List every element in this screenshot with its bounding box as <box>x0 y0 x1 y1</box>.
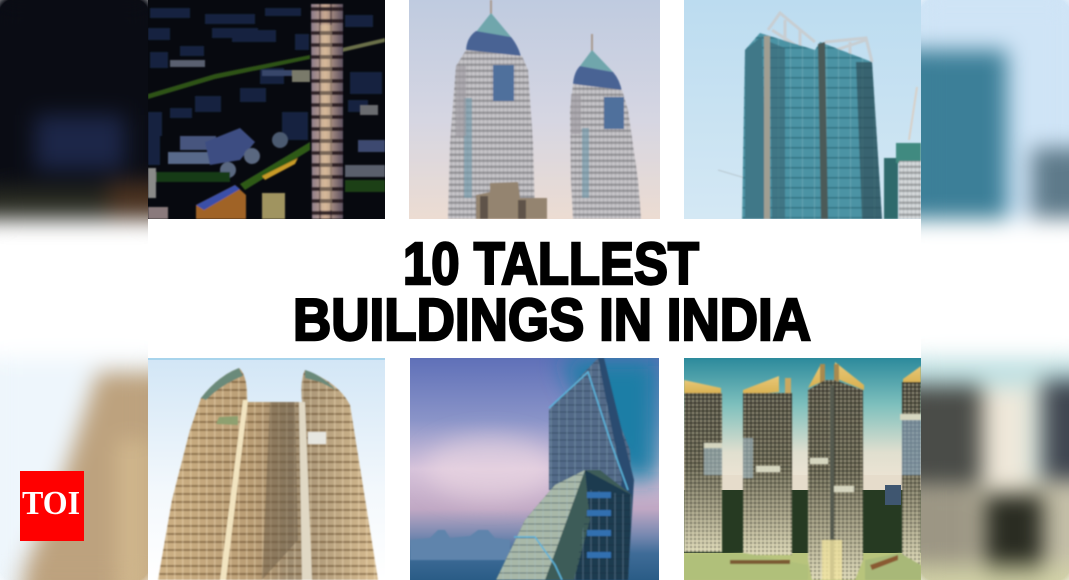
tower 2 <box>743 376 792 555</box>
title band <box>148 219 921 358</box>
photo panel: glass office tower at dusk <box>410 358 659 580</box>
logo: TOI: TOI <box>22 485 80 522</box>
city blocks <box>148 8 382 165</box>
blurred left background <box>0 0 148 580</box>
right tower <box>570 34 641 219</box>
blurred right background <box>921 0 1069 580</box>
main body <box>742 33 882 219</box>
title <box>293 231 811 353</box>
photo panel: tan tower under construction <box>148 358 385 580</box>
foreground block <box>476 182 547 219</box>
tower 4 <box>900 366 921 567</box>
roof frame <box>768 13 872 62</box>
crane <box>909 87 917 140</box>
distant skyline <box>410 530 510 560</box>
logo: TOI <box>20 471 84 541</box>
photo panel: night aerial tower <box>148 0 385 219</box>
residential cluster <box>168 152 214 164</box>
tower <box>311 4 343 219</box>
green roads <box>148 55 310 99</box>
podium garden <box>718 552 790 564</box>
left tower <box>448 0 535 219</box>
neighbouring tower <box>884 158 898 219</box>
lower wedge <box>544 470 629 580</box>
foreground lit buildings <box>196 185 246 219</box>
photo panel: teal glass tower <box>684 0 921 219</box>
title: 10 TALLEST <box>403 231 699 297</box>
tower 1 <box>684 380 722 552</box>
title: BUILDINGS IN INDIA <box>293 287 811 353</box>
upper tower <box>549 358 632 495</box>
photo panel: twin towers <box>409 0 660 219</box>
photo panel: four residential towers <box>684 358 921 580</box>
tower 3 <box>808 362 864 580</box>
